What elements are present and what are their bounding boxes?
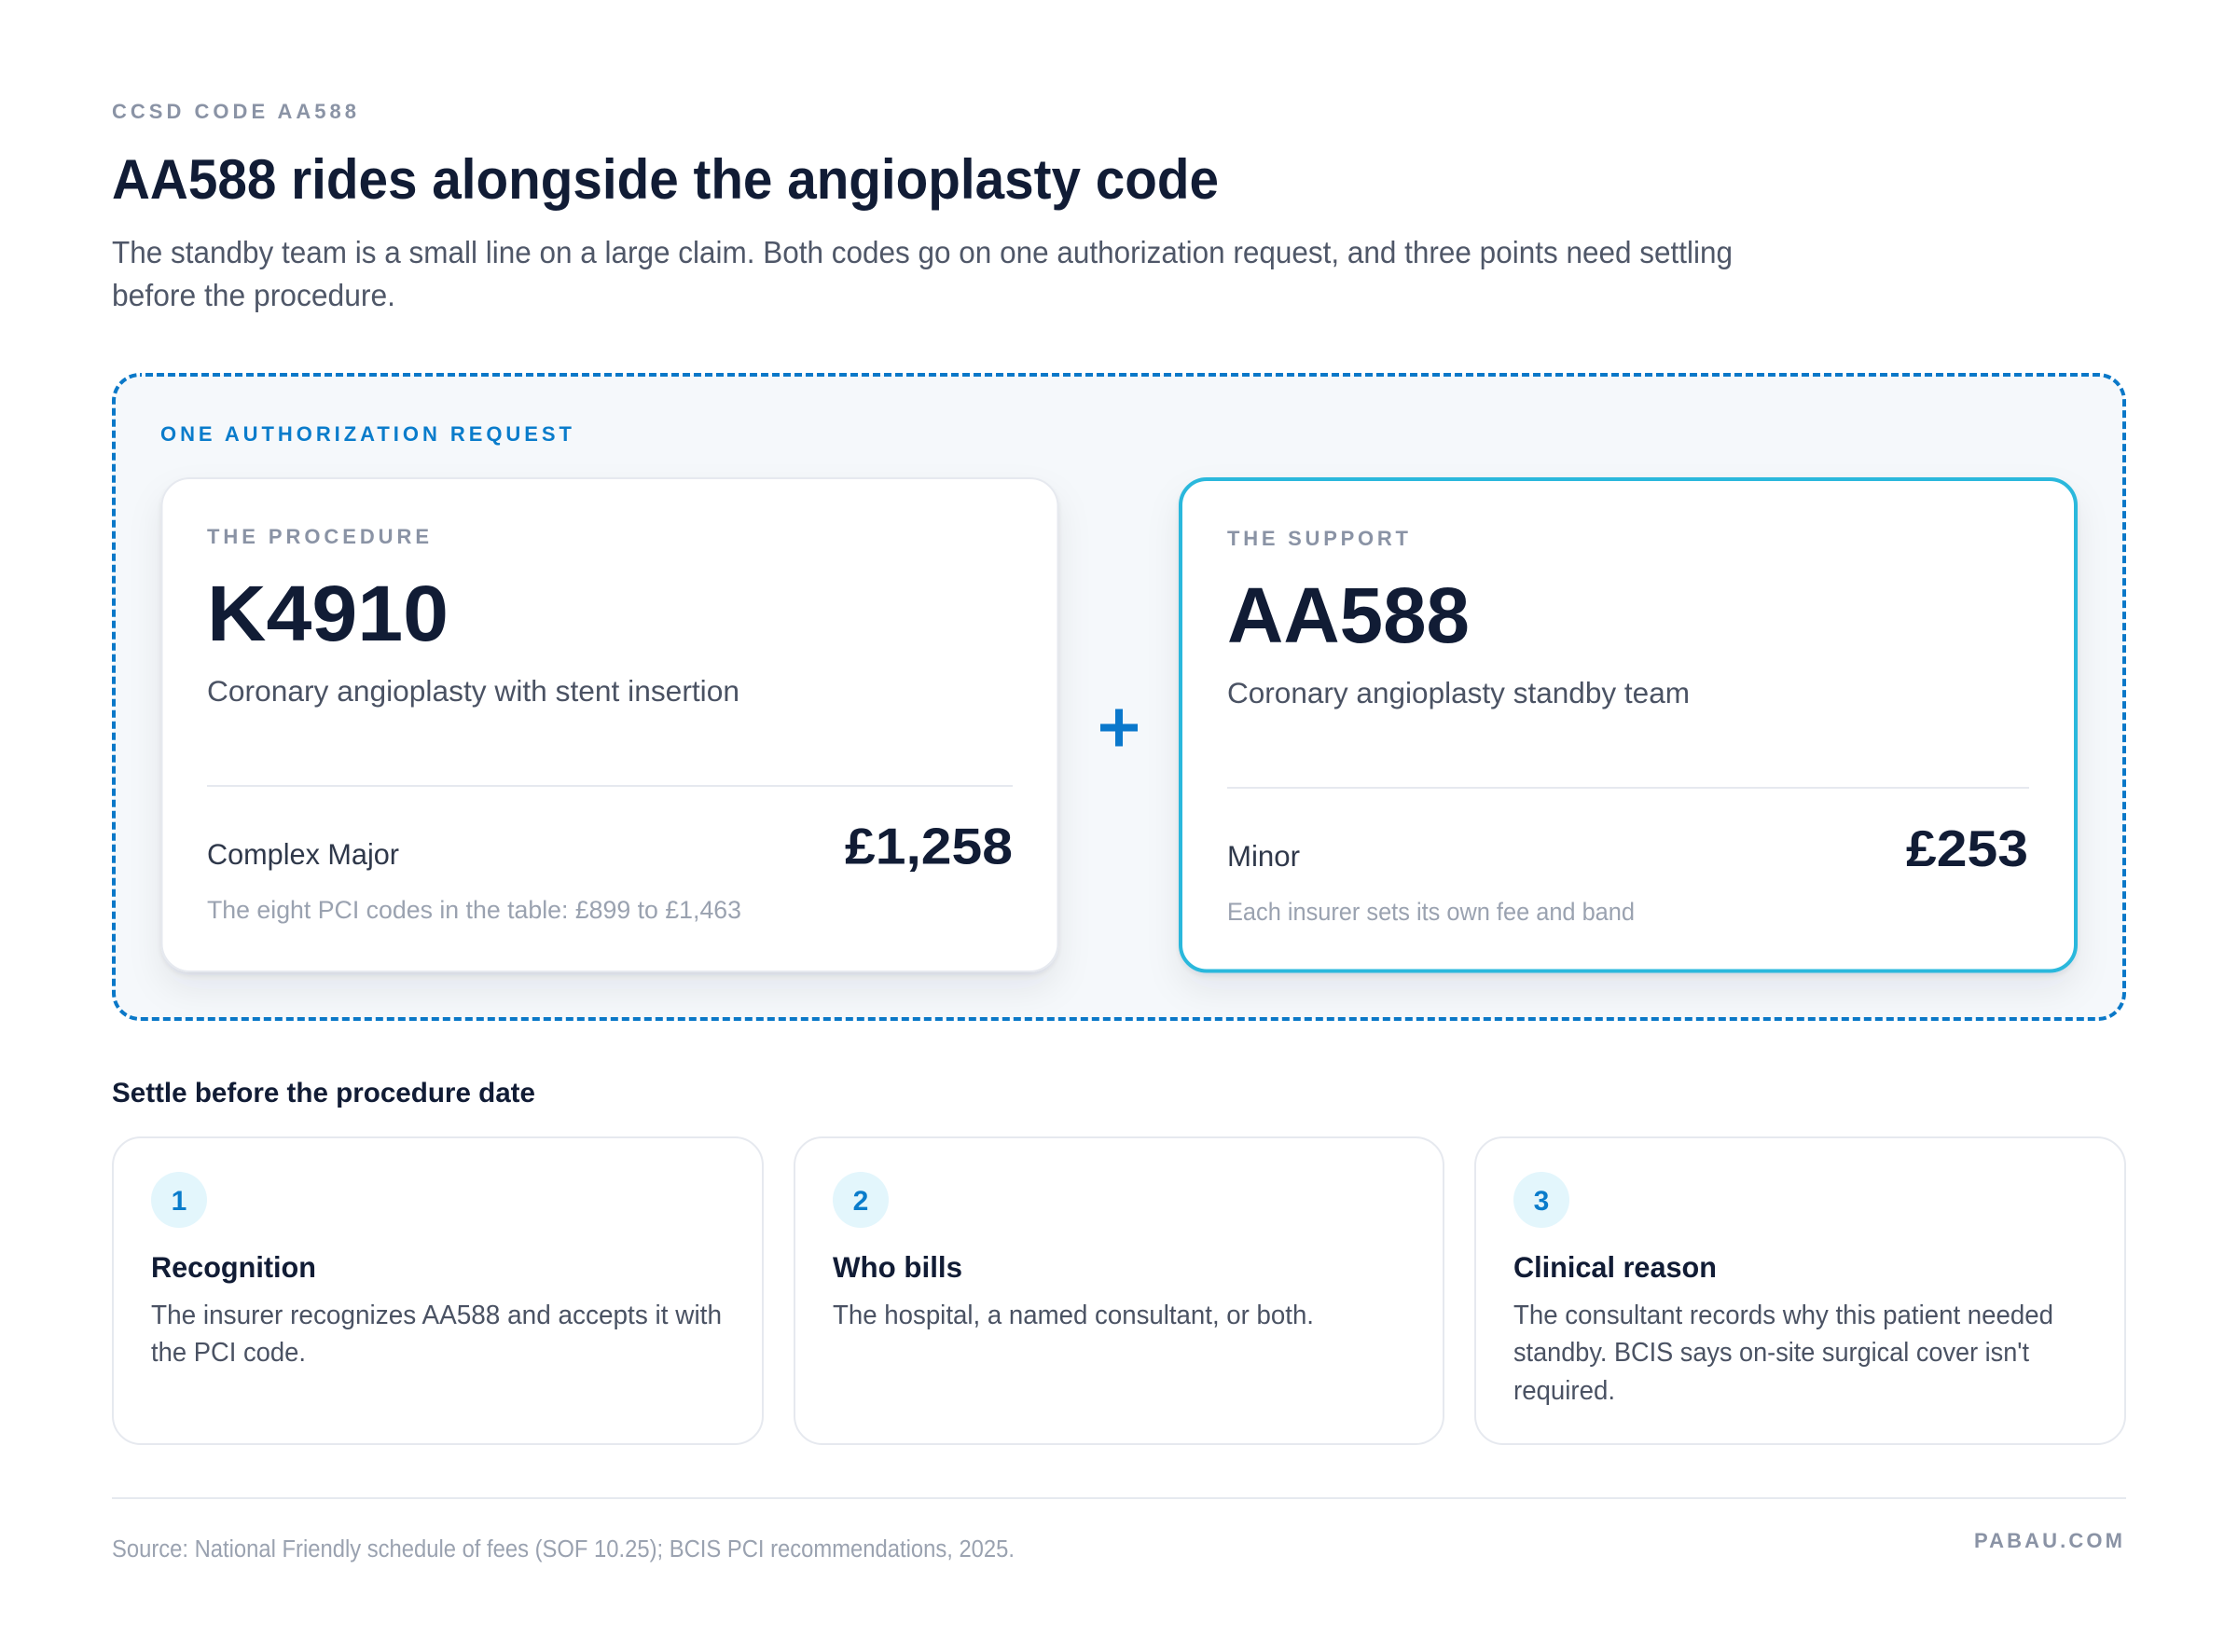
support description: Coronary angioplasty standby team [1227,676,1690,709]
panel heading: ONE AUTHORIZATION REQUEST [160,422,573,446]
procedure note: The eight PCI codes in the table: £899 to £1,463 [207,896,741,924]
support label: THE SUPPORT [1227,527,1409,550]
procedure fee: £1,258 [845,817,1013,874]
source note: Source: National Friendly schedule of fees (SOF 10.25); BCIS PCI recommendations, 2025. [112,1536,1015,1563]
step 2 title: Who bills [833,1250,962,1284]
step 2 text: The hospital, a named consultant, or both. [833,1301,1314,1330]
title: AA588 rides alongside the angioplasty code [112,148,1219,211]
step 2: who bills [794,1137,1444,1444]
support note: Each insurer sets its own fee and band [1227,898,1635,926]
support fee: £253 [1906,819,2028,877]
step 1 number badge: 1 [172,1186,186,1217]
step 3 text: The consultant records why this patient needed [1513,1301,2053,1330]
step 1 card [113,1137,763,1444]
eyebrow: CCSD CODE AA588 [112,100,356,123]
panel: one authorization request [114,375,2124,1019]
subtitle: before the procedure. [112,278,395,312]
procedure description: Coronary angioplasty with stent insertion [207,674,739,708]
procedure card box [162,478,1057,971]
step 3 number badge [1513,1172,1569,1228]
step 2 card [794,1137,1444,1444]
card: the support [1181,479,2076,971]
step 3 text: required. [1513,1376,1615,1406]
header [112,100,1733,312]
subtitle: The standby team is a small line on a large claim. Both codes go on one authorization request, and three points need settling [112,235,1733,269]
step 3 number badge: 3 [1534,1186,1549,1217]
step 3: clinical reason [1475,1137,2125,1444]
step 2 number badge [833,1172,889,1228]
step 3 text: standby. BCIS says on-site surgical cover isn't [1513,1338,2029,1368]
step 1 title: Recognition [151,1250,316,1284]
step 1 text: the PCI code. [151,1338,306,1368]
step 2 number badge: 2 [853,1186,868,1217]
step 1 text: The insurer recognizes AA588 and accepts it with [151,1301,722,1330]
card: the procedure [162,478,1057,971]
panel background with dashed border [114,375,2124,1019]
support code: AA588 [1227,571,1470,659]
procedure code: K4910 [207,570,449,657]
step 3 title: Clinical reason [1513,1250,1717,1284]
support band: Minor [1227,839,1300,873]
support card box [1181,479,2076,971]
section heading: Settle before the procedure date [112,1078,535,1108]
procedure band: Complex Major [207,837,399,871]
step 3 card [1475,1137,2125,1444]
procedure label: THE PROCEDURE [207,525,429,548]
step 1: recognition [113,1137,763,1444]
step 1 number badge [151,1172,207,1228]
brand mark: PABAU.COM [1974,1529,2122,1552]
icon: plus sign [1100,709,1138,746]
